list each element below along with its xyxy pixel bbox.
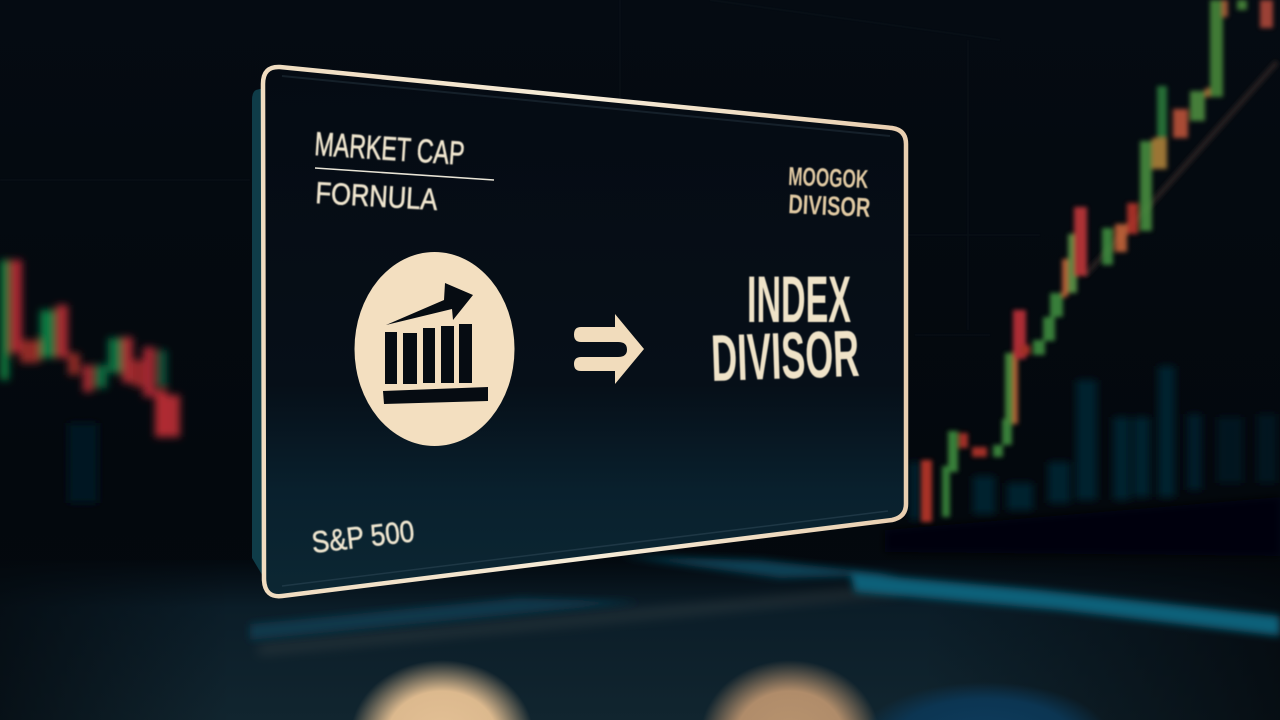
floor reflections bbox=[258, 570, 1110, 720]
heading: market cap: MARKET CAP bbox=[314, 125, 466, 172]
floor bbox=[0, 497, 1280, 720]
icon: chart in circle bbox=[354, 252, 514, 446]
label: top right: DIVISOR bbox=[788, 189, 871, 223]
label: s&amp;p 500: S&P 500 bbox=[310, 513, 416, 560]
right candlestick chart bbox=[921, 0, 1273, 522]
title: index divisor: INDEX bbox=[747, 262, 851, 336]
trend line bbox=[1085, 62, 1277, 275]
left candlestick chart bbox=[0, 260, 180, 503]
right volume bars bbox=[910, 366, 1277, 520]
panel: glass card bbox=[263, 67, 906, 596]
card back bevel bbox=[252, 88, 264, 578]
heading divider bbox=[315, 168, 494, 180]
title: index divisor: DIVISOR bbox=[710, 316, 860, 395]
blue light streaks on floor bbox=[250, 556, 1280, 640]
heading: formula: FORNULA bbox=[315, 175, 439, 217]
label: top right bbox=[788, 161, 871, 223]
arrow bbox=[574, 314, 644, 384]
title: index divisor bbox=[710, 262, 860, 395]
label: top right: MOOGOK bbox=[788, 161, 869, 194]
